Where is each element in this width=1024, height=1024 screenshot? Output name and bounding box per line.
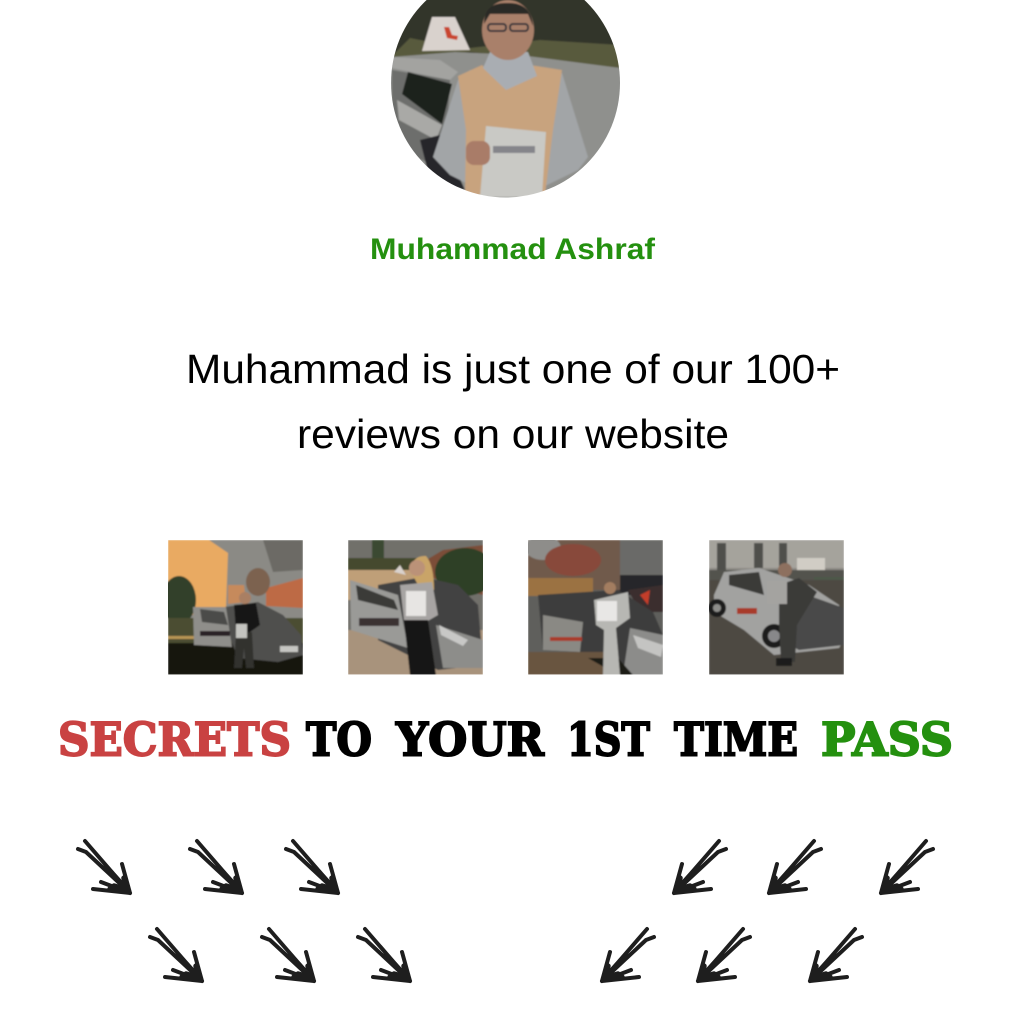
title: Secrets to your 1st time pass	[58, 712, 953, 767]
review text: Muhammad is just one of our 100+	[186, 346, 840, 392]
title: Secrets to your 1st time pass: PASS	[821, 712, 953, 767]
photo 1: pupil with car by orange house	[162, 540, 303, 675]
arrows pointing down-left	[602, 841, 933, 981]
photo 4: pupil beside silver car on road	[708, 540, 844, 675]
name heading: Muhammad Ashraf	[370, 233, 656, 266]
title: Secrets to your 1st time pass: TIME	[674, 712, 798, 767]
title: Secrets to your 1st time pass: YOUR	[395, 712, 545, 767]
profile photo: Muhammad Ashraf holding certificate	[390, 0, 625, 200]
title: Secrets to your 1st time pass: 1ST	[567, 712, 650, 767]
photo 3: pupil with car under autumn tree	[525, 536, 663, 675]
review text: reviews on our website	[297, 411, 729, 457]
photo 2: pupil with car on gravel drive	[348, 540, 495, 675]
title: Secrets to your 1st time pass: TO	[306, 712, 372, 767]
title: Secrets to your 1st time pass: SECRETS	[58, 712, 291, 767]
review text	[186, 346, 840, 457]
arrows pointing down-right	[78, 841, 410, 981]
